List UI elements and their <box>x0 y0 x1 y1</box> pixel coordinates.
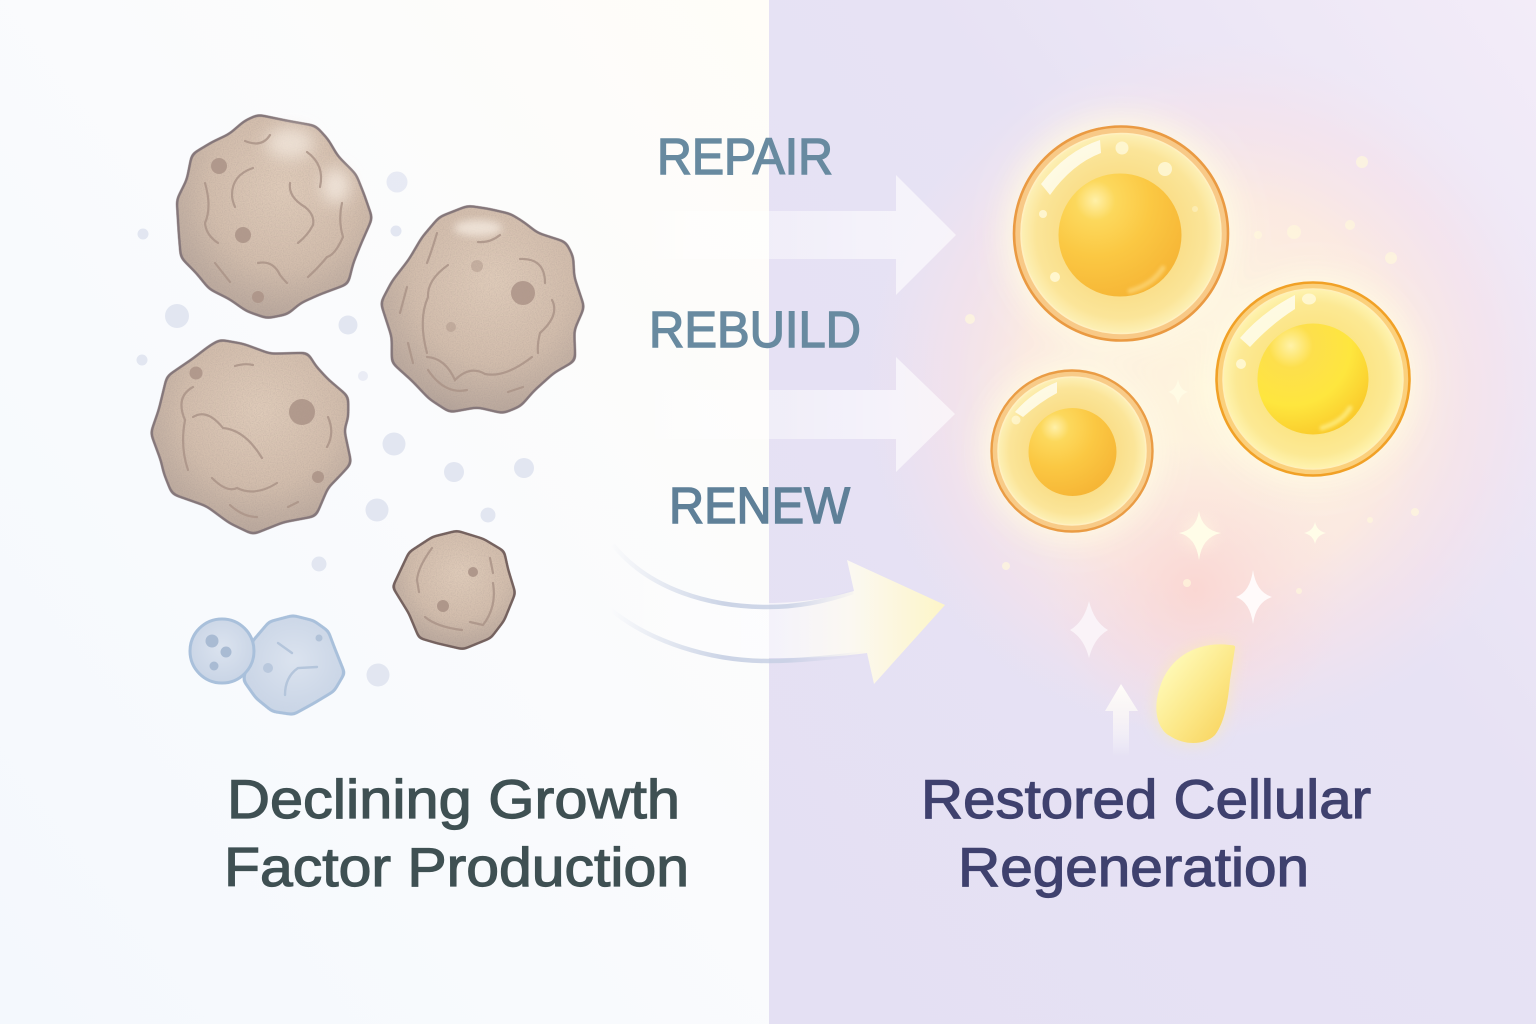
icon: up arrow <box>1105 684 1138 756</box>
heading: restored cellular regeneration: Regeneration <box>958 836 1309 898</box>
cell glow <box>984 117 1417 539</box>
label: renew: RENEW <box>669 477 850 534</box>
label: repair: REPAIR <box>657 128 833 185</box>
heading: restored cellular regeneration <box>921 768 1371 898</box>
heading: declining growth factor production: Declining Growth <box>227 768 680 830</box>
faded blue cells <box>190 617 343 713</box>
damaged cell 4 <box>394 532 514 648</box>
arrow: renew curved <box>610 545 945 684</box>
damaged cell 1 <box>178 116 371 317</box>
restored cell 1 <box>1014 126 1228 340</box>
damaged cell 3 <box>152 341 350 533</box>
heading: declining growth factor production: Factor Production <box>224 836 689 898</box>
arrow: rebuild <box>635 357 955 472</box>
arrow: repair <box>635 175 956 295</box>
damaged cell 2 <box>382 207 583 412</box>
heading: declining growth factor production <box>224 768 689 898</box>
label: rebuild: REBUILD <box>649 301 861 358</box>
restored cell 2 <box>1216 282 1410 476</box>
heading: restored cellular regeneration: Restored Cellular <box>921 768 1371 830</box>
panel: left background <box>0 0 769 1024</box>
panel: right background <box>769 0 1536 1024</box>
glowing particles <box>965 156 1419 594</box>
sparkles <box>1070 379 1326 658</box>
floating debris particles <box>136 172 534 686</box>
icon: growth factor drop <box>1156 644 1235 743</box>
restored cell 3 <box>992 370 1152 532</box>
